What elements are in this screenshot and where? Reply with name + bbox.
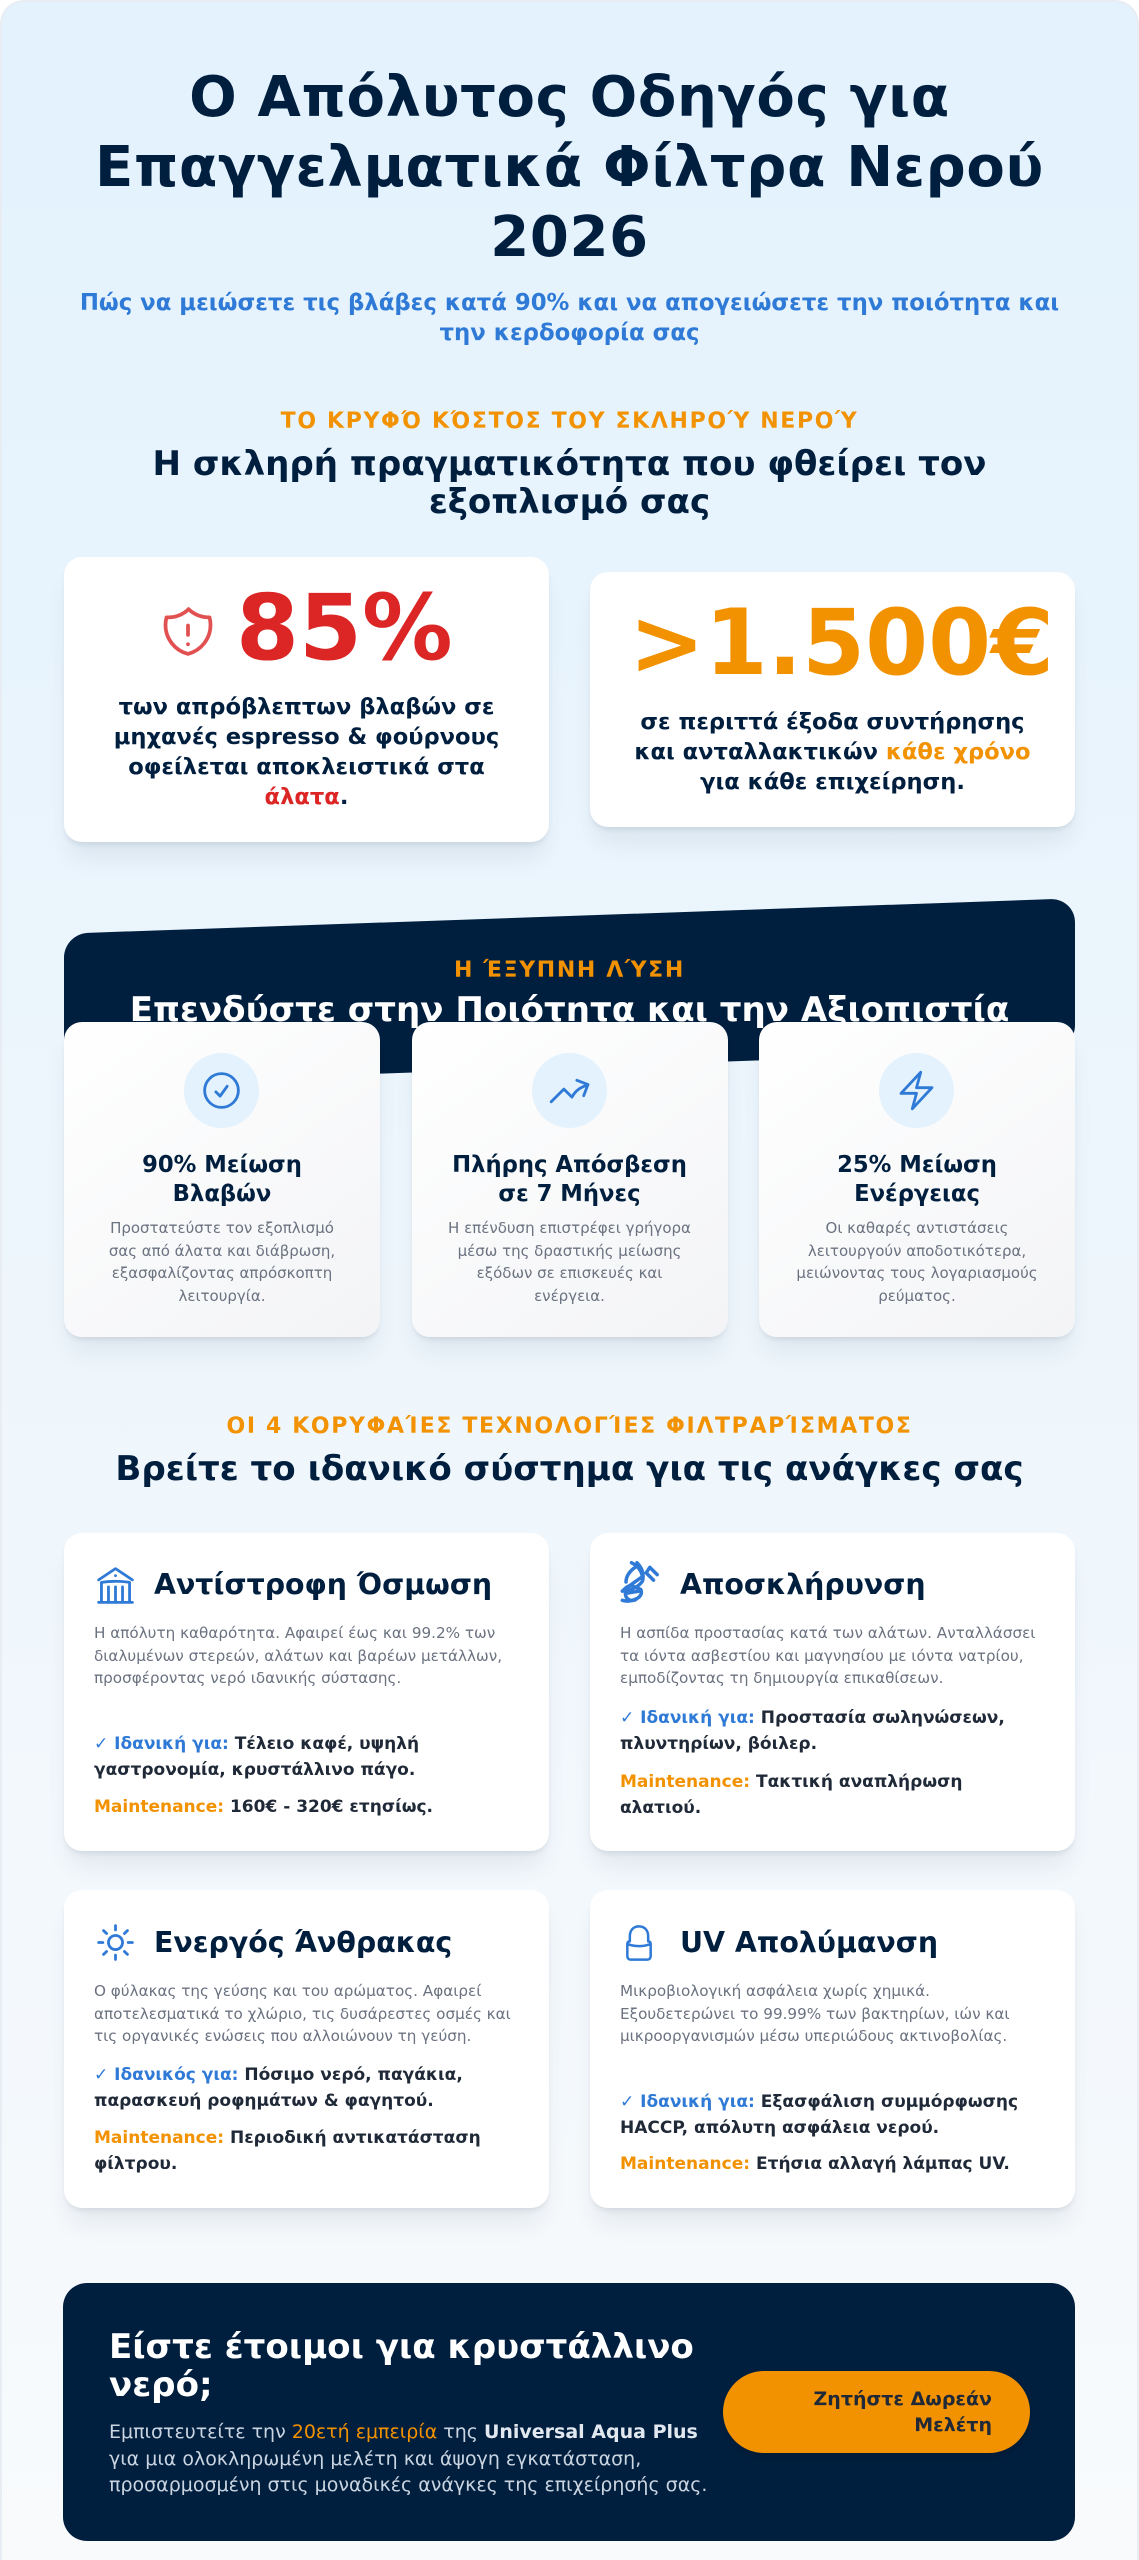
tech description: Μικροβιολογική ασφάλεια χωρίς χημικά. xyxy=(620,1982,930,2000)
CTA text: προσαρμοσμένη στις μοναδικές ανάγκες της επιχείρησής σας. xyxy=(109,2474,707,2496)
tech description: Εξουδετερώνει το 99.99% των βακτηρίων, ιών και xyxy=(620,2004,1010,2022)
tech description xyxy=(620,1982,1010,2045)
icon: check circle xyxy=(184,1053,259,1128)
section heading: hard reality: εξοπλισμό σας xyxy=(429,482,710,522)
CTA heading: Είστε έτοιμοι για κρυστάλλινο xyxy=(109,2327,694,2367)
ideal use: HACCP, απόλυτη ασφάλεια νερού. xyxy=(620,2118,939,2138)
benefit description: λειτουργία. xyxy=(178,1286,266,1304)
benefit description: εξασφαλίζοντας απρόσκοπτη xyxy=(112,1264,332,1282)
icon: trending up arrow xyxy=(532,1053,606,1128)
title xyxy=(95,65,1044,270)
tech card: activated carbon xyxy=(64,1890,549,2208)
icon: sun xyxy=(97,1924,134,1961)
benefit description: Η επένδυση επιστρέφει γρήγορα xyxy=(448,1219,691,1237)
section eyebrow: smart solution: Η ΈΞΥΠΝΗ ΛΎΣΗ xyxy=(454,958,685,983)
benefit heading: Πλήρης Απόσβεση xyxy=(452,1152,687,1178)
tech description: διαλυμένων στερεών, αλάτων και βαρέων μετάλλων, xyxy=(94,1646,502,1664)
section eyebrow: top 4 technologies: ΟΙ 4 ΚΟΡΥΦΑΊΕΣ ΤΕΧΝΟΛΟΓΊΕΣ ΦΙΛΤΡΑΡΊΣΜΑΤΟΣ xyxy=(226,1414,913,1439)
stat card: 1500 euro xyxy=(590,572,1075,827)
benefit heading: 25% Μείωση xyxy=(837,1152,997,1178)
maintenance: Maintenance: Τακτική αναπλήρωση xyxy=(620,1772,962,1792)
stat description: μηχανές espresso & φούρνους xyxy=(114,724,499,750)
benefit description: Οι καθαρές αντιστάσεις xyxy=(826,1219,1008,1237)
ideal use xyxy=(94,2065,463,2111)
tech description: τις οργανικές ενώσεις που αλλοιώνουν τη γεύση. xyxy=(94,2027,471,2045)
tech card: UV disinfection xyxy=(590,1890,1075,2208)
benefit description: λειτουργούν αποδοτικότερα, xyxy=(808,1242,1026,1260)
tech description: τα ιόντα ασβεστίου και μαγνησίου με ιόντα νατρίου, xyxy=(620,1646,1024,1664)
CTA text: για μια ολοκληρωμένη μελέτη και άψογη εγκατάσταση, xyxy=(109,2448,641,2470)
tech description: εμποδίζοντας τη δημιουργία επικαθίσεων. xyxy=(620,1669,943,1687)
benefit card: payback in 7 months xyxy=(412,1022,728,1337)
benefit heading: σε 7 Μήνες xyxy=(498,1181,641,1207)
section heading: invest in quality: Επενδύστε στην Ποιότητα και την Αξιοπιστία xyxy=(130,990,1009,1030)
title: Επαγγελματικά Φίλτρα Νερού xyxy=(95,135,1044,200)
benefit heading: Βλαβών xyxy=(173,1181,271,1207)
CTA heading xyxy=(109,2327,694,2405)
dark skewed banner xyxy=(64,898,1075,1085)
stat description: σε περιττά έξοδα συντήρησης xyxy=(640,709,1025,735)
stat description: οφείλεται αποκλειστικά στα xyxy=(128,754,485,780)
ideal use: πλυντηρίων, βόιλερ. xyxy=(620,1734,817,1754)
maintenance: Maintenance: Περιοδική αντικατάσταση xyxy=(94,2128,481,2148)
benefit heading: Ενέργειας xyxy=(854,1181,980,1207)
CTA text: Εμπιστευτείτε την 20ετή εμπειρία της Universal Aqua Plus xyxy=(109,2421,698,2443)
stat number: >1.500€: >1.500€ xyxy=(629,591,1054,696)
stat description xyxy=(634,709,1031,795)
section heading: hard reality: Η σκληρή πραγματικότητα που φθείρει τον xyxy=(152,444,987,484)
tech description: Η ασπίδα προστασίας κατά των αλάτων. Ανταλλάσσει xyxy=(620,1624,1035,1642)
title: Ο Απόλυτος Οδηγός για xyxy=(189,65,950,130)
subtitle: την κερδοφορία σας xyxy=(440,320,700,346)
button label: Μελέτη xyxy=(914,2414,992,2436)
section eyebrow: hidden cost: ΤΟ ΚΡΥΦΌ ΚΌΣΤΟΣ ΤΟΥ ΣΚΛΗΡΟΎ ΝΕΡΟΎ xyxy=(281,409,858,434)
section heading: ideal system: Βρείτε το ιδανικό σύστημα για τις ανάγκες σας xyxy=(115,1449,1024,1489)
benefit heading: 90% Μείωση xyxy=(142,1152,302,1178)
icon: lightning bolt xyxy=(879,1053,954,1128)
tech title: Ενεργός Άνθρακας xyxy=(154,1926,452,1959)
subtitle: Πώς να μειώσετε τις βλάβες κατά 90% και να απογειώσετε την ποιότητα και xyxy=(80,290,1059,316)
benefit description: μέσω της δραστικής μείωσης xyxy=(458,1242,681,1260)
benefit description: μειώνοντας τους λογαριασμούς xyxy=(796,1264,1038,1282)
icon: softener scribble xyxy=(620,1560,659,1603)
CTA button xyxy=(723,2371,1030,2453)
ideal use: ✓ Ιδανικός για: Πόσιμο νερό, παγάκια, xyxy=(94,2065,463,2085)
benefit card: 90% fewer failures xyxy=(64,1022,380,1337)
section heading: hard reality xyxy=(152,444,987,522)
benefit heading xyxy=(837,1152,997,1207)
CTA text xyxy=(109,2421,707,2496)
benefit card: 25% less energy xyxy=(759,1022,1075,1337)
tech description: Η απόλυτη καθαρότητα. Αφαιρεί έως και 99.2% των xyxy=(94,1624,495,1642)
stat description: των απρόβλεπτων βλαβών σε xyxy=(119,694,494,720)
ideal use: γαστρονομία, κρυστάλλινο πάγο. xyxy=(94,1760,415,1780)
maintenance xyxy=(620,1772,962,1818)
maintenance: Maintenance: Ετήσια αλλαγή λάμπας UV. xyxy=(620,2154,1010,2174)
tech description: Ο φύλακας της γεύσης και του αρώματος. Αφαιρεί xyxy=(94,1982,481,2000)
CTA heading: νερό; xyxy=(109,2365,213,2405)
subtitle xyxy=(80,290,1059,346)
tech title: Αντίστροφη Όσμωση xyxy=(154,1568,492,1601)
call to action panel xyxy=(63,2283,1075,2541)
stat card: 85% xyxy=(64,557,549,842)
tech description xyxy=(620,1624,1035,1687)
benefit description: εξόδων σε επισκευές και xyxy=(477,1264,662,1282)
stat number: 85%: 85% xyxy=(236,576,453,681)
ideal use: ✓ Ιδανική για: Τέλειο καφέ, υψηλή xyxy=(94,1734,419,1754)
maintenance: Maintenance: 160€ - 320€ ετησίως. xyxy=(94,1797,433,1817)
tech title: Αποσκλήρυνση xyxy=(680,1568,926,1601)
tech description: αποτελεσματικά το χλώριο, τις δυσάρεστες οσμές και xyxy=(94,2004,511,2022)
benefit description: ρεύματος. xyxy=(878,1286,956,1304)
tech card: reverse osmosis xyxy=(64,1533,549,1851)
stat description: για κάθε επιχείρηση. xyxy=(700,769,965,795)
benefit description: ενέργεια. xyxy=(534,1286,605,1304)
ideal use: ✓ Ιδανική για: Προστασία σωληνώσεων, xyxy=(620,1708,1005,1728)
benefit description xyxy=(109,1219,335,1304)
icon: UV lamp xyxy=(626,1925,652,1961)
ideal use xyxy=(94,1734,419,1780)
tech card: softening xyxy=(590,1533,1075,1851)
benefit heading xyxy=(142,1152,302,1207)
stat description: άλατα. xyxy=(265,784,348,810)
ideal use xyxy=(620,1708,1005,1754)
maintenance: φίλτρου. xyxy=(94,2154,177,2174)
benefit heading xyxy=(452,1152,687,1207)
ideal use xyxy=(620,2092,1018,2138)
maintenance: αλατιού. xyxy=(620,1798,701,1818)
maintenance xyxy=(94,2128,481,2174)
button label xyxy=(814,2388,992,2436)
stat description: και ανταλλακτικών κάθε χρόνο xyxy=(634,739,1031,765)
tech description: μικροοργανισμών μέσω υπεριώδους ακτινοβολίας. xyxy=(620,2027,1007,2045)
tech description xyxy=(94,1624,502,1687)
tech description: προσφέροντας νερό ιδανικής σύστασης. xyxy=(94,1669,401,1687)
benefit description xyxy=(448,1219,691,1304)
ideal use: ✓ Ιδανική για: Εξασφάλιση συμμόρφωσης xyxy=(620,2092,1018,2112)
button label: Ζητήστε Δωρεάν xyxy=(814,2388,992,2410)
ideal use: παρασκευή ροφημάτων & φαγητού. xyxy=(94,2091,434,2111)
benefit description xyxy=(796,1219,1038,1304)
icon: building columns xyxy=(97,1567,134,1604)
icon: shield warning xyxy=(164,607,212,656)
title: 2026 xyxy=(490,205,649,270)
tech description xyxy=(94,1982,511,2045)
benefit description: σας από άλατα και διάβρωση, xyxy=(109,1242,335,1260)
benefit description: Προστατεύστε τον εξοπλισμό xyxy=(110,1219,334,1237)
tech title: UV Απολύμανση xyxy=(680,1926,938,1959)
stat description xyxy=(114,694,499,810)
